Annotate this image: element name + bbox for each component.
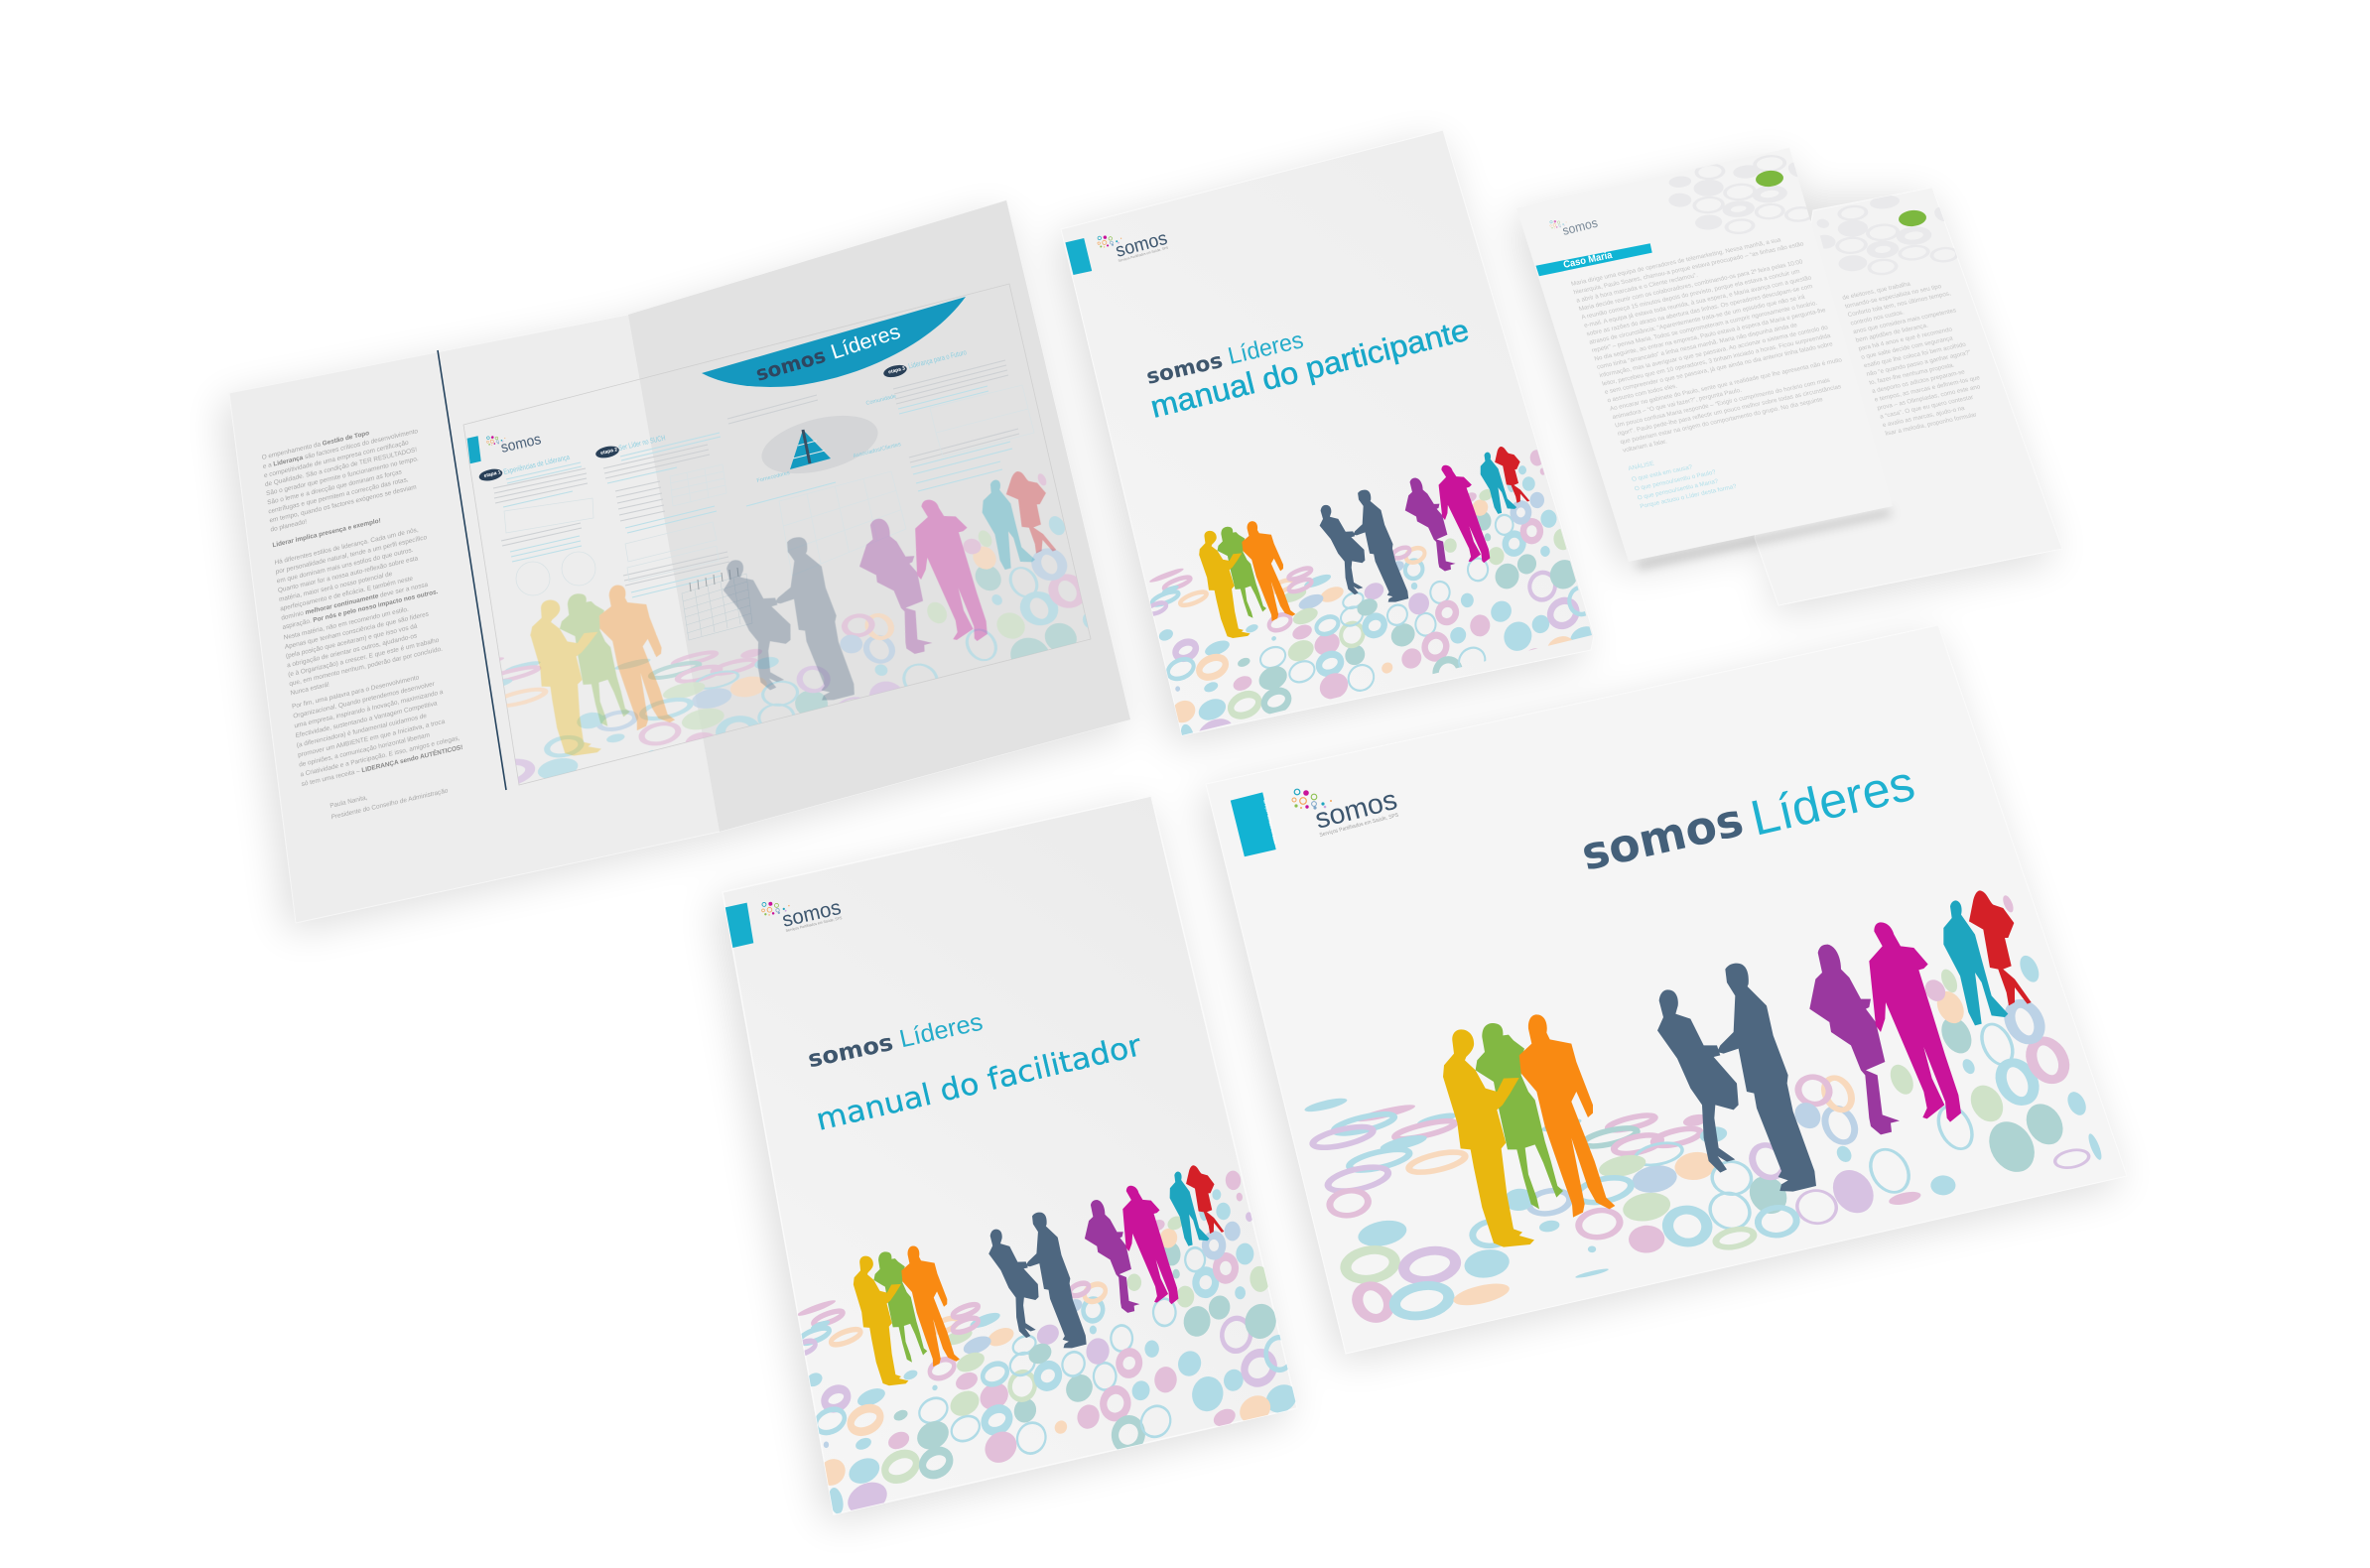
- participant cyan tab: [1065, 238, 1092, 275]
- brochure left page letter: a Criatividade e a Participação. E isso, amigos e colegas,: [300, 734, 461, 778]
- back sheet text: e tempos, as marcas e definem-los que: [1874, 374, 1981, 404]
- facilitator logo: somos: [780, 896, 844, 932]
- brochure pyramid diagram: Associados/Clientes: [853, 442, 902, 459]
- brochure left page letter: matéria, maior será o nosso potencial de: [279, 571, 393, 603]
- facilitator title line 1: Líderes: [897, 1008, 986, 1053]
- brochure left page letter: centrífugas e que permitem a correcção das rotas,: [268, 476, 409, 515]
- brochure left page letter: em tempo, quando os factores exógenos se desviam: [269, 483, 417, 525]
- front sheet body text: leitor, percebeu que em 10 operadores, 3 tinham iniciado a horas. Ficou surpreendida: [1601, 332, 1832, 388]
- brochure left page letter: que, em momento nenhum, poderão dar por concluído.: [289, 645, 443, 688]
- brochure left page letter: (pela posição que aceitaram) e que isso vos dá: [286, 623, 418, 660]
- back sheet text: e avalio as marcas, ajudo-o na: [1882, 405, 1966, 429]
- panel: open brochure spread: [229, 200, 1130, 923]
- brochure left page letter: (a diferenciadora) é fundamental cuidarmos de: [297, 713, 428, 749]
- front sheet logo: somos: [1561, 215, 1600, 238]
- brochure left page letter: (e à Organização) a crescer. E que este é um trabalho: [288, 637, 440, 679]
- brochure step labels: [478, 347, 968, 482]
- front sheet body text: que poderiam estar na origem do comportamento do grupo. No dia seguinte: [1620, 396, 1824, 446]
- brochure faint form lines: [493, 360, 1034, 640]
- large cover title: somos: [1576, 793, 1748, 881]
- front sheet body text: hierarquia, Paulo Soares, chamou-a porque estava preocupado – “as linhas não estão: [1573, 240, 1805, 296]
- brochure step labels: etapa 2: [600, 447, 618, 457]
- participant silhouettes: [1199, 445, 1529, 640]
- back sheet text: para há 4 anos e que é recomendo: [1858, 326, 1954, 352]
- back sheet text: [1841, 273, 1992, 438]
- front sheet analysis questions: ANÁLISE: [1628, 460, 1654, 472]
- participant ring pattern: [1143, 446, 1602, 752]
- large cover cyan tab: [1231, 792, 1277, 856]
- back sheet text: tornando-se especialista no seu tipo: [1844, 283, 1943, 310]
- front sheet body text: rigor!”. Paulo pede-lhe para reflectir um pouco melhor sobre todas as circunstâncias: [1617, 383, 1842, 438]
- brochure left page letter: Paula Nanita,: [329, 794, 368, 810]
- brochure paper: [229, 200, 1130, 923]
- brochure left page letter: Por fim, uma palavra para o Desenvolvimento: [292, 674, 420, 711]
- front sheet body text: No dia seguinte, ao entrar na empresa, Paulo estava à espera da Maria e pergunta-lhe: [1594, 307, 1827, 362]
- brochure left page letter: aperfeiçoamento e de eficácia. E também neste: [280, 576, 414, 612]
- front sheet paper: [1516, 148, 1893, 562]
- back sheet green dot: [1898, 209, 1927, 227]
- front sheet body text: animadora – “O que vai fazer?”, pergunta Paulo.: [1612, 387, 1743, 421]
- facilitator cover paper: [723, 796, 1297, 1514]
- front sheet analysis questions: Porque actuou o Líder desta forma?: [1640, 483, 1738, 510]
- brochure pyramid diagram: [755, 394, 902, 484]
- front sheet body text: [1570, 231, 1856, 455]
- brochure left page letter: de Qualidade. São a condição de TER RESULTADOS!: [265, 447, 418, 488]
- Caso Maria heading bar: [1536, 243, 1652, 276]
- facilitator cyan tab: [725, 903, 753, 948]
- brochure step labels: Experiências de Liderança: [502, 453, 571, 476]
- facilitator ring pattern: [793, 1168, 1300, 1520]
- brochure left page letter: uma empresa, inspirando à Inovação, maximizando a: [294, 689, 444, 729]
- brochure left page letter: do planeado!: [270, 518, 308, 534]
- large cover silhouettes: [1443, 890, 2032, 1247]
- back sheet text: a desporto os adictos preparam-se: [1871, 368, 1966, 395]
- participant title line 2: manual do participante: [1147, 313, 1473, 425]
- participant title line 1: Líderes: [1226, 327, 1306, 370]
- front sheet body text: o assunto com todos eles.: [1607, 383, 1678, 404]
- brochure left page letter: domínio melhorar continuamente deve ser a nossa: [281, 582, 429, 622]
- brochure step labels: Liderança para o Futuro: [907, 347, 968, 370]
- brochure left page letter: Apenas que tenham consciência de que são líderes: [285, 610, 429, 651]
- brochure left page letter: Quanto maior for a nossa auto-reflexão sobre esta: [278, 555, 419, 594]
- brochure left page letter: São o leme e a direcção que dominam as forças: [267, 468, 402, 506]
- participant title line 1: somos: [1144, 348, 1225, 389]
- front sheet body text: informação, mas ia averiguar o que se passava. Ao accionar o sistema de controlo do: [1599, 324, 1829, 379]
- brochure left page letter: promover um AMBIENTE em que a Iniciativa, a troca: [298, 719, 446, 759]
- panel: manual do participante: [1061, 130, 1602, 752]
- brochure blue banner: somos: [753, 343, 829, 386]
- large cover logo: somos: [1312, 784, 1400, 835]
- document shadows: [220, 139, 2122, 1524]
- front sheet body text: a abrir à hora marcada e o Cliente reclamou”.: [1575, 272, 1699, 305]
- brochure left page letter: São o gerador que permite o funcionamento no tempo.: [266, 456, 419, 497]
- back sheet text: esafio que lhe coloca foi bem acolhido: [1863, 341, 1967, 369]
- brochure left page letter: de opiniões, a comunicação horizontal libertam: [299, 731, 430, 769]
- participant logo: Serviços Partilhados em Saúde, SPS: [1118, 245, 1169, 263]
- brochure left page letter: Liderar implica presença e exemplo!: [272, 517, 381, 549]
- facilitator title line 1: somos: [806, 1030, 895, 1073]
- back sheet text: lisar a melodia, proponho formular: [1885, 412, 1978, 438]
- facilitator logo: Serviços Partilhados em Saúde, SPS: [785, 916, 843, 933]
- brochure right shaded flap: [628, 200, 1130, 832]
- front sheet body text: repetir” – pensa Maria. Todos se comprometeram a cumprir rigorosamente o horário.: [1591, 300, 1818, 354]
- front sheet green dot: [1755, 170, 1784, 188]
- large cover logo: Serviços Partilhados em Saúde, SPS: [1319, 813, 1399, 839]
- front sheet body text: como tinha “arrancado” a linha nessa manhã. Maria não dispunha ainda de: [1596, 322, 1798, 371]
- back sheet paper: [1755, 188, 2062, 605]
- large cover paper: [1206, 625, 2127, 1354]
- brochure left page letter: Efectividade, sustentando a Vantagem Competitiva: [295, 700, 438, 739]
- brochure left page letter: Há diferentes estilos de liderança. Cada um de nós,: [274, 526, 419, 567]
- brochure left page letter: [261, 417, 467, 827]
- back sheet text: o que salte decide com segurança: [1860, 334, 1954, 361]
- front sheet edge shadow: [1638, 512, 1891, 566]
- brochure left page letter: só tem uma receita – LIDERANÇA sendo AUTÊNTICOS!: [301, 742, 463, 788]
- back sheet text: prova – as Olimpíadas, como este ano: [1877, 383, 1982, 412]
- back sheet text: to, fazer-lhe nenhuma proposta.: [1868, 361, 1956, 386]
- vertical navy rule: [438, 350, 506, 790]
- large cover ring pattern: [1303, 894, 2104, 1322]
- front sheet body text: Maria decide reunir com os colaboradores, combinando-os para 2ª feira pelas 10:00: [1578, 258, 1804, 313]
- brochure inner artwork frame: [463, 284, 1091, 785]
- brochure left page letter: e a Liderança são factores críticos do desenvolvimento: [263, 428, 419, 470]
- brochure left page letter: Presidente do Conselho de Administração: [330, 787, 449, 821]
- front sheet body text: e-mail. A equipa já estava toda reunida, à sua espera, e Maria avança com a questão: [1583, 274, 1813, 329]
- front sheet body text: atrasos de circunstância: “Aparentemente trata-se de um episódio que não se irá: [1588, 294, 1806, 346]
- brochure pyramid diagram: Fornecedores: [756, 470, 791, 484]
- participant title line 1: [1144, 327, 1306, 389]
- brochure left page letter: Organizacional. Quando pretendemos desenvolver: [293, 681, 436, 720]
- back sheet text: de eleitores, que trabalha: [1841, 281, 1911, 302]
- participant cover paper: [1061, 130, 1594, 735]
- back sheet text: controlo nos custos.: [1850, 309, 1906, 327]
- front sheet body text: e sem compreender o que se passava, já que ainda no dia anterior tinha falado sobre: [1604, 340, 1834, 396]
- brochure left page letter: a obrigação de orientar os outros, ajudando-os: [287, 632, 417, 669]
- back sheet text: não “e quando passo a ganhar agora?”: [1866, 349, 1972, 378]
- large cover title: Líderes: [1746, 755, 1919, 847]
- front sheet analysis questions: O que está em causa?: [1631, 463, 1694, 483]
- brochure blue banner: Líderes: [828, 321, 903, 364]
- panel: letter sheet front: [1516, 148, 1893, 566]
- brochure inner logo: somos: [499, 431, 543, 457]
- front sheet analysis questions: O que pensou/sentiu a Maria?: [1637, 477, 1720, 502]
- brochure left page letter: Nesta matéria, não em recomendo um estilo.: [283, 605, 409, 642]
- brochure pyramid diagram: Comunidade: [865, 394, 897, 407]
- back sheet text: Conforto tola tem, nos últimos tempos,: [1847, 290, 1952, 319]
- brochure step labels: etapa 1: [483, 469, 501, 479]
- brochure left page letter: aspiração. Por nós e pelo nosso impacto nos outros.: [282, 588, 439, 631]
- front sheet grey rings: [1666, 154, 1816, 235]
- facilitator title line 2: manual do facilitador: [813, 1028, 1145, 1138]
- brochure blue banner: [702, 297, 966, 387]
- panel: letter sheet back: [1755, 188, 2062, 605]
- front sheet body text: sobre as razões do atraso na abertura das linhas. Os operadores desculpam-se com: [1586, 283, 1813, 337]
- brochure step labels: etapa 3: [888, 365, 906, 375]
- large cover title: [1576, 755, 1919, 881]
- front sheet body text: A reunião começa 15 minutos depois do previsto, porque ela estava a concluir um: [1581, 268, 1800, 321]
- front sheet body text: Um pouco confusa Maria responde – “Exigir o cumprimento do horário com mais: [1614, 377, 1831, 429]
- back sheet text: bem aptidões de liderança.: [1855, 322, 1929, 344]
- brochure step labels: Ser Líder no SUCH: [617, 433, 666, 453]
- back sheet text: a “casa”. O que eu quero contestar: [1879, 394, 1974, 421]
- large cover cyan tab: Serviços Partilhados em Saúde: [1262, 799, 1277, 845]
- front sheet analysis questions: O que pensou/sentiu o Paulo?: [1634, 468, 1717, 492]
- panel: manual do facilitador: [723, 796, 1300, 1520]
- brochure pale ring pattern: [500, 473, 1088, 784]
- brochure left page letter: por personalidade natural, tende a um perfil específico: [275, 534, 428, 576]
- brochure left page letter: e competitividade de uma empresa com certificação: [264, 440, 409, 479]
- front sheet body text: Ao encarar no gabinete do Paulo, sente que a realidade que lhe apresenta não é muito: [1609, 356, 1843, 413]
- facilitator silhouettes: [851, 1164, 1226, 1386]
- back sheet text: anos que considera mais competentes: [1852, 307, 1957, 335]
- front sheet analysis questions: [1628, 445, 1738, 510]
- panel: large landscape cover: [1206, 625, 2127, 1354]
- Caso Maria heading bar: Caso Maria: [1562, 250, 1614, 271]
- facilitator title line 1: [806, 1008, 986, 1073]
- participant logo: somos: [1114, 228, 1169, 262]
- brochure pale silhouettes: [520, 468, 1063, 759]
- brochure left page letter: O empenhamento da Gestão de Topo: [261, 430, 370, 461]
- brochure left page letter: em que dominam mais uns estilos do que outros.: [276, 547, 414, 586]
- front sheet body text: Maria dirige uma equipa de operadores de telemarketing. Nessa manhã, a sua: [1570, 236, 1782, 288]
- back sheet grey rings: [1811, 194, 1960, 276]
- brochure left page letter: Nunca estará!: [290, 681, 329, 697]
- brochure inner logo: [467, 431, 543, 463]
- front sheet body text: voltariam a falar.: [1622, 438, 1668, 455]
